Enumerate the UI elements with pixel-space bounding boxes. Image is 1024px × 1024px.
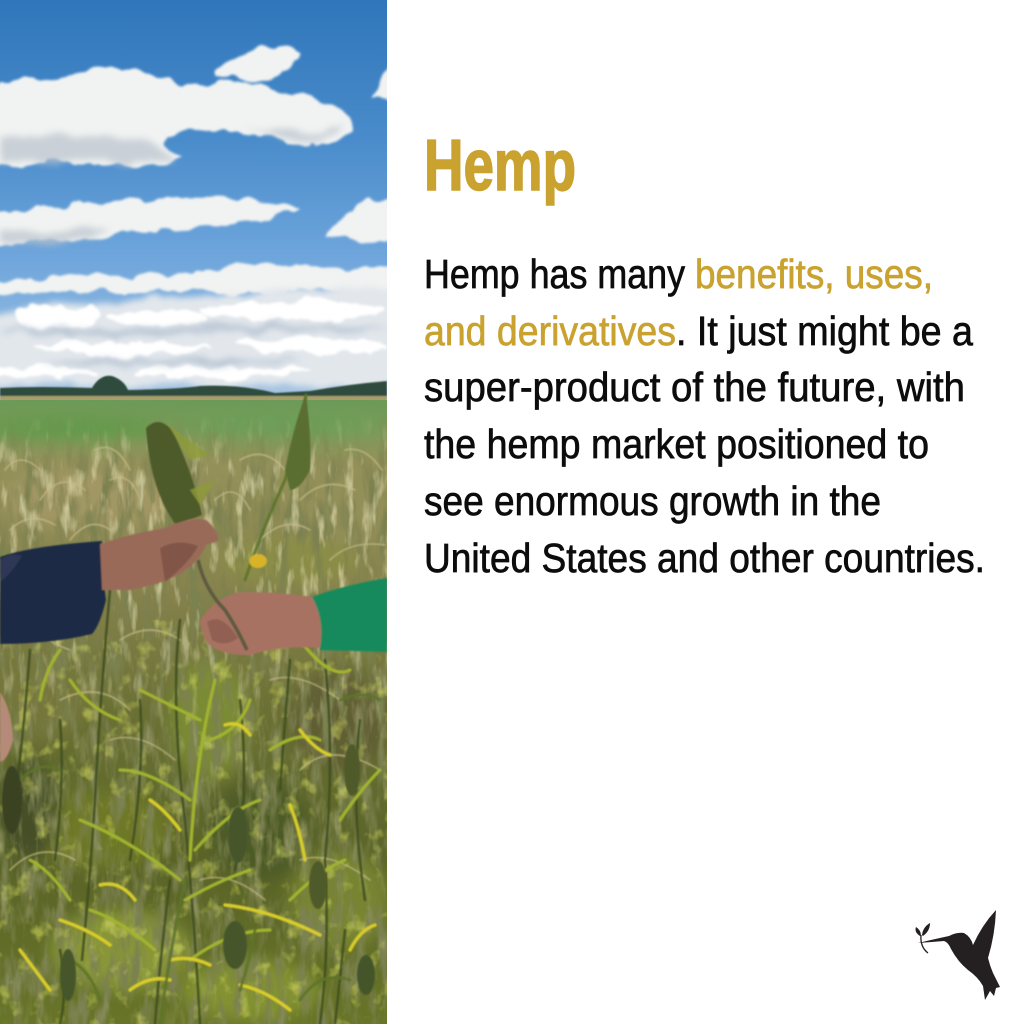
body text: . It just might be a	[676, 308, 973, 354]
panel: field photograph	[0, 0, 400, 1024]
icon: hummingbird logo with sprig	[916, 910, 1000, 1000]
grass blades	[5, 395, 385, 1024]
right arm in green sleeve	[200, 578, 387, 655]
grass texture	[0, 400, 387, 1024]
hemp buds	[2, 395, 375, 1001]
body text: see enormous growth in the	[424, 478, 881, 524]
body text: Hemp has many	[424, 251, 685, 297]
body text: the hemp market positioned to	[424, 421, 929, 467]
field colour patches	[0, 412, 390, 1020]
third hand at left edge	[0, 692, 13, 762]
body text: and derivatives	[424, 308, 676, 354]
field	[0, 400, 387, 1024]
treeline	[0, 376, 387, 401]
stem held between hands	[198, 560, 247, 650]
left arm in navy sleeve	[0, 519, 218, 644]
body text	[424, 251, 985, 581]
clouds	[0, 45, 400, 387]
body text: super-product of the future, with	[424, 364, 965, 410]
body text: benefits, uses,	[695, 251, 933, 297]
sky	[0, 0, 387, 400]
title: Hemp	[424, 126, 576, 206]
